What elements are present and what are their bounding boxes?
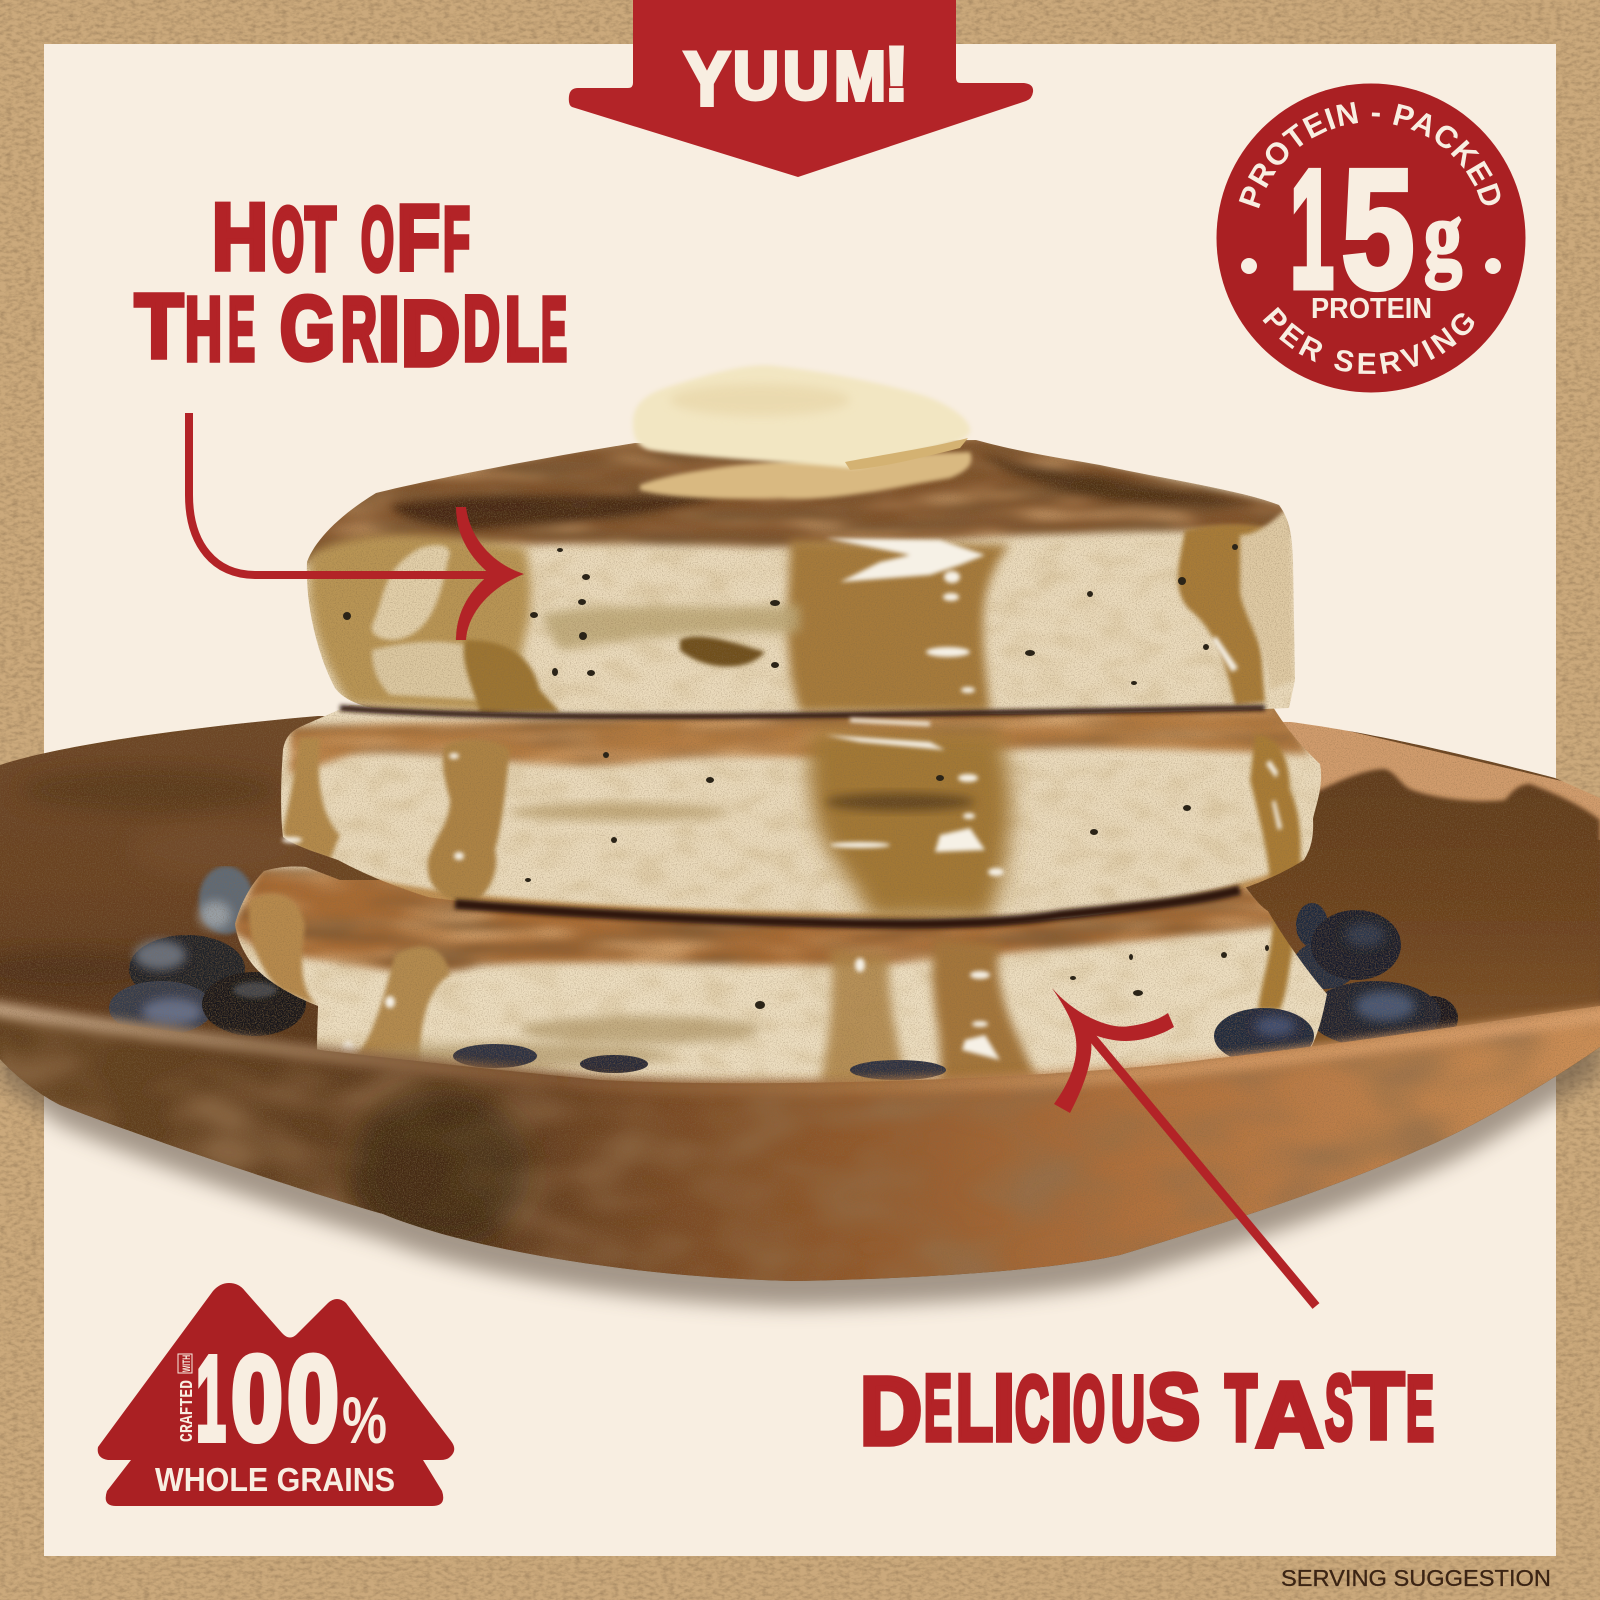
heading: hot off the griddle: T: [135, 277, 183, 377]
heading: delicious taste: I: [993, 1355, 1015, 1460]
syrup drips: [249, 894, 318, 1006]
heading: delicious taste: O: [1073, 1358, 1105, 1460]
left blueberries: [109, 866, 306, 1036]
photo: pancake stack on a wooden plate: [0, 365, 1600, 1307]
top crust: [300, 436, 1300, 566]
poppy seeds: [343, 544, 1269, 1009]
text: yuum: !: [884, 32, 909, 117]
badge: 100% whole grains: [98, 1283, 454, 1506]
text: yuum: M: [834, 37, 886, 115]
heading: hot off the griddle: H: [212, 184, 268, 289]
heading: hot off the griddle: L: [505, 280, 539, 380]
badge: dots: [1241, 258, 1501, 274]
syrup areas: [309, 535, 531, 712]
plate outer rim right: [1280, 715, 1600, 840]
heading: hot off the griddle: I: [378, 280, 400, 380]
heading: hot off the griddle: D: [463, 278, 500, 380]
heading: hot off the griddle: D: [401, 283, 460, 385]
plate rim highlight: [0, 1008, 1600, 1088]
heading: hot off the griddle: T: [305, 190, 336, 290]
heading: hot off the griddle: F: [443, 190, 470, 290]
heading: delicious taste: E: [924, 1355, 952, 1460]
text: yuum: U: [783, 38, 829, 114]
badge: crafted with: WITH: [181, 1355, 193, 1372]
heading: hot off the griddle: R: [341, 280, 377, 380]
heading: hot off the griddle: F: [397, 187, 440, 289]
badge: protein: PROTEIN: [1311, 293, 1432, 325]
badge: arc text bottom: PER SERVING: [1262, 306, 1474, 374]
bottom crust: [235, 866, 1275, 978]
middle crust: [284, 708, 1312, 778]
plate shadow: [0, 1020, 1600, 1307]
badge: 15: 5: [1342, 135, 1414, 323]
badge: percent: %: [342, 1383, 387, 1457]
arrow: delicious taste callout: [1052, 988, 1316, 1306]
heading: delicious taste: C: [1015, 1358, 1049, 1460]
heading: hot off the griddle: G: [280, 279, 335, 379]
heading: hot off the griddle: E: [228, 280, 255, 380]
heading: hot off the griddle: O: [361, 190, 394, 290]
heading: delicious taste: I: [1050, 1355, 1073, 1460]
plate interior right: [1312, 766, 1600, 1046]
heading: delicious taste: D: [860, 1358, 922, 1465]
wooden plate back: [0, 700, 1600, 1300]
heading: delicious taste: A: [1256, 1364, 1323, 1466]
gaps between pancakes: [340, 708, 1265, 924]
heading: delicious taste: U: [1111, 1358, 1145, 1460]
badge: whole grains: WHOLE GRAINS: [155, 1461, 395, 1498]
heading: delicious taste: T: [1225, 1355, 1257, 1460]
heading: delicious taste: T: [1353, 1353, 1404, 1458]
badge: 100: 0: [287, 1330, 339, 1466]
badge: g: g: [1424, 182, 1462, 290]
heading: delicious taste: L: [956, 1355, 993, 1460]
arrow: griddle callout: [189, 413, 524, 640]
text: serving suggestion: SERVING SUGGESTION: [1281, 1565, 1551, 1591]
text: yuum: Y: [684, 37, 730, 122]
heading: hot off the griddle: O: [272, 190, 304, 290]
syrup highlights: [282, 538, 1282, 1060]
text: E: [541, 280, 567, 380]
heading: delicious taste: S: [1325, 1357, 1353, 1459]
heading: hot off the griddle: H: [185, 280, 222, 380]
plate interior left: [0, 934, 318, 1046]
syrup drips: [283, 738, 340, 860]
front-right blueberry: [1214, 1008, 1314, 1064]
heading: hot off the griddle: [135, 184, 567, 385]
badge: 100: 0: [231, 1330, 283, 1466]
butter pat: [633, 365, 971, 499]
top pancake: [300, 430, 1300, 720]
heading: delicious taste: S: [1147, 1356, 1200, 1458]
arrow: yuum banner: [569, 0, 1033, 177]
bottom-edge blueberries: [453, 1044, 537, 1068]
right blueberries: [1293, 903, 1458, 1047]
middle pancake: [270, 700, 1330, 930]
badge: 15: 1: [1290, 135, 1334, 323]
badge: arc text top: PROTEIN - PACKED: [1238, 102, 1500, 208]
text: yuum: U: [733, 38, 779, 114]
text: E: [1406, 1358, 1434, 1460]
badge: crafted with: CRAFTED: [178, 1380, 198, 1442]
blueberries behind the stack: [109, 866, 1458, 1047]
bottom pancake: [235, 866, 1327, 1084]
badge: 100: 1: [196, 1330, 226, 1466]
badge: 15g protein per serving: [1216, 84, 1526, 392]
plate front wall: [0, 990, 1600, 1290]
